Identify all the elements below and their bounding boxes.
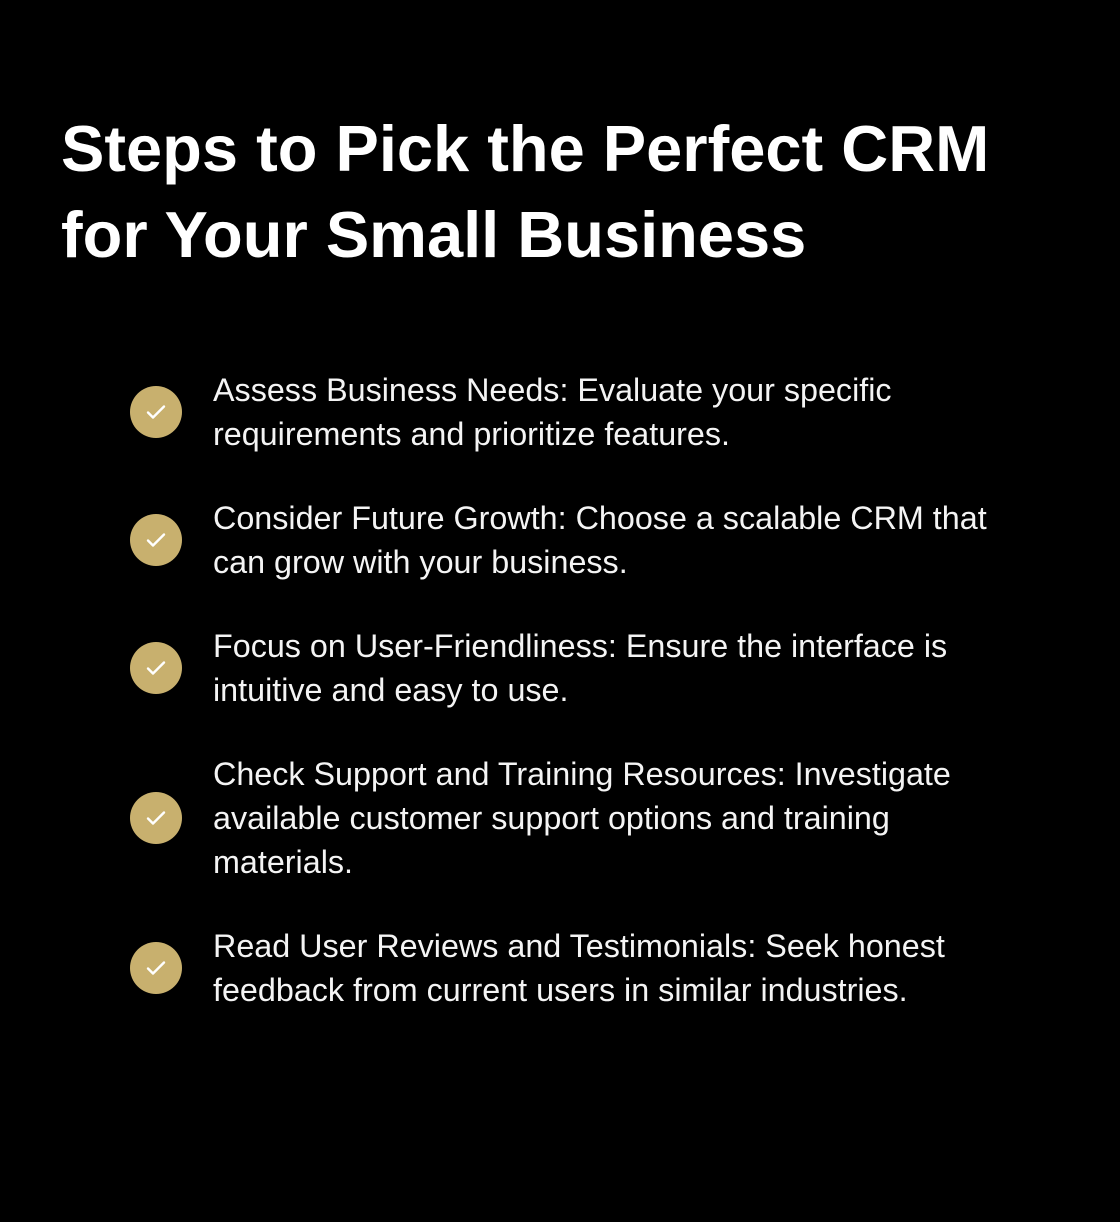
item 1 xyxy=(130,372,892,452)
icon: check xyxy=(130,792,182,844)
icon: check xyxy=(130,386,182,438)
icon: check xyxy=(130,514,182,566)
text xyxy=(213,628,947,708)
text: Check Support and Training Resources: Investigate xyxy=(213,756,951,792)
text: can grow with your business. xyxy=(213,544,628,580)
text: Focus on User-Friendliness: Ensure the interface is xyxy=(213,628,947,664)
text: materials. xyxy=(213,844,353,880)
text: available customer support options and training xyxy=(213,800,890,836)
item 4 xyxy=(130,756,951,880)
title: Steps to Pick the Perfect CRM xyxy=(61,112,989,185)
text xyxy=(213,928,945,1008)
text: feedback from current users in similar industries. xyxy=(213,972,908,1008)
text xyxy=(213,500,987,580)
text: Assess Business Needs: Evaluate your specific xyxy=(213,372,892,408)
title xyxy=(61,112,989,271)
text xyxy=(213,372,892,452)
title: for Your Small Business xyxy=(61,198,806,271)
item 5 xyxy=(130,928,945,1008)
item 3 xyxy=(130,628,947,708)
icon: check xyxy=(130,642,182,694)
item 2 xyxy=(130,500,987,580)
text xyxy=(213,756,951,880)
text: intuitive and easy to use. xyxy=(213,672,568,708)
icon: check xyxy=(130,942,182,994)
text: Consider Future Growth: Choose a scalable CRM that xyxy=(213,500,987,536)
text: Read User Reviews and Testimonials: Seek honest xyxy=(213,928,945,964)
text: requirements and prioritize features. xyxy=(213,416,730,452)
